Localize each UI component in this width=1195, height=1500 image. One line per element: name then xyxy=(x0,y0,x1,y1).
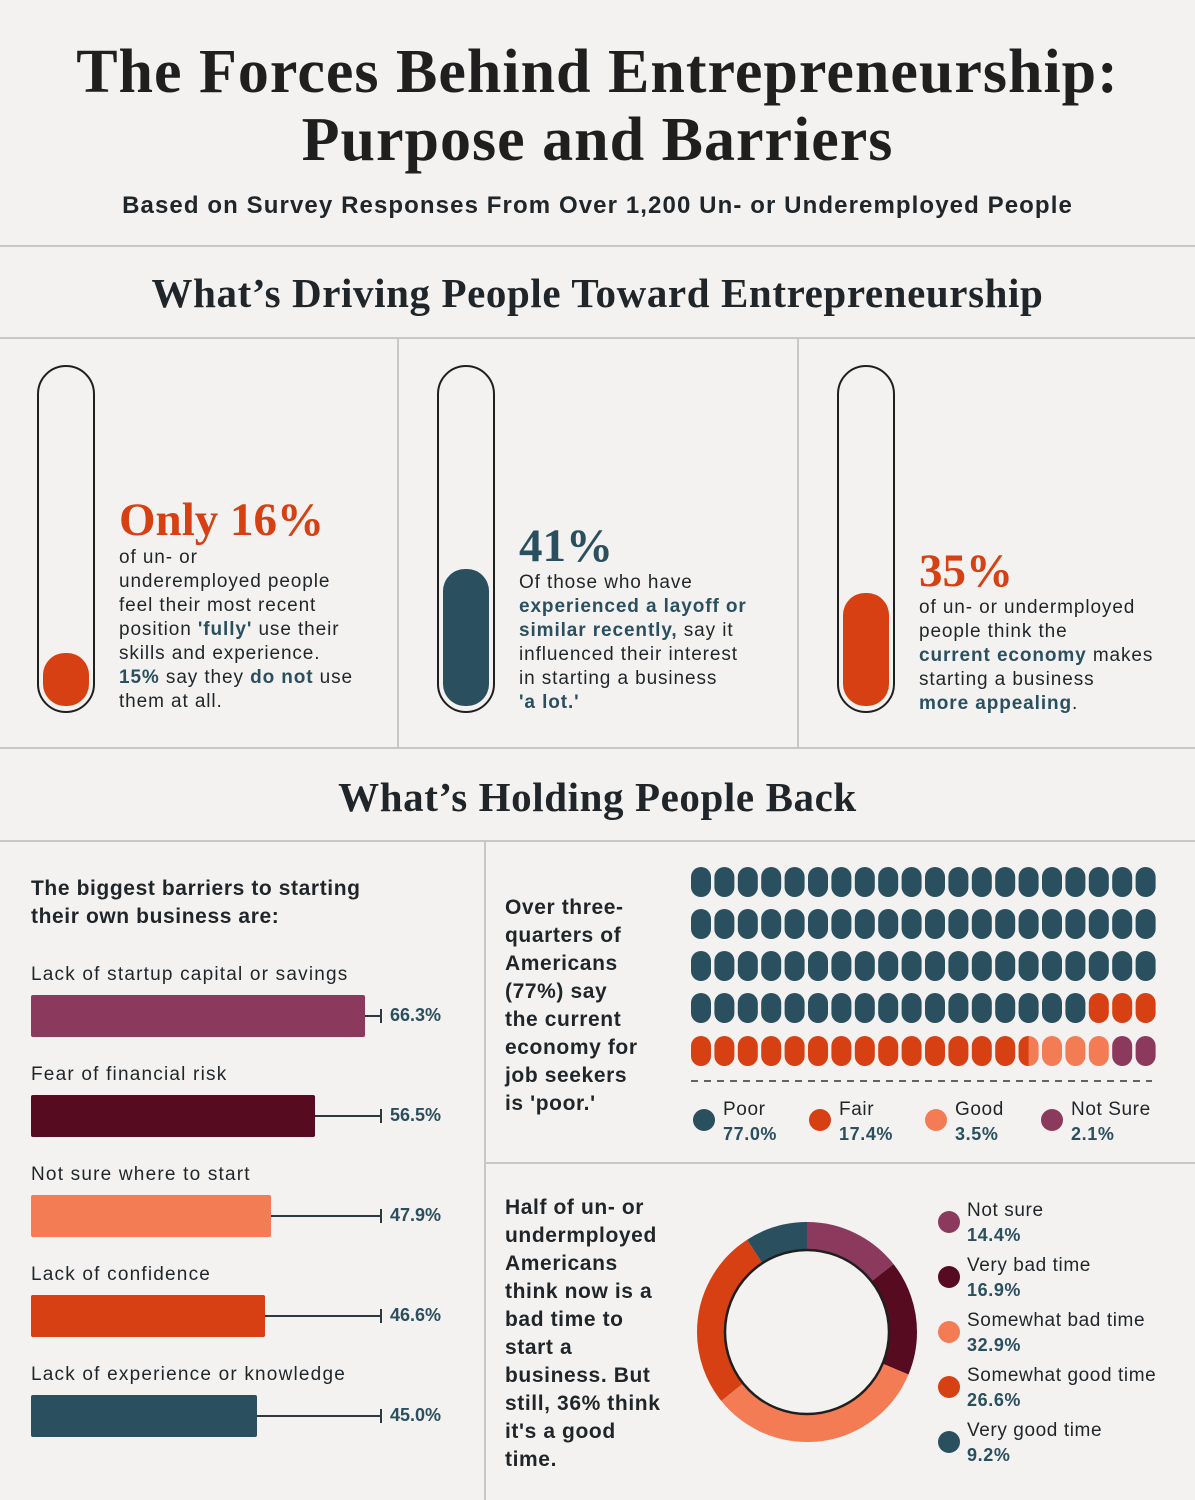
icon: thermometer 35% xyxy=(837,365,895,713)
text block: start a xyxy=(505,1336,572,1359)
legend: donut: 9.2% xyxy=(967,1445,1010,1465)
panel: barriers bar chart xyxy=(31,877,441,1437)
stat: 41%: 41% xyxy=(519,520,613,572)
text block xyxy=(119,547,353,712)
bar: where to start: 47.9% xyxy=(390,1205,441,1225)
bar: financial risk: 56.5% xyxy=(390,1105,441,1125)
panel: economy waffle text: is 'poor.' xyxy=(505,1092,596,1115)
panel: 16% xyxy=(37,365,353,713)
title: Purpose and Barriers xyxy=(302,106,893,174)
text block: undermployed xyxy=(505,1224,657,1247)
legend: waffle: Good xyxy=(955,1099,1004,1120)
text block: them at all. xyxy=(119,691,223,712)
bar: startup capital xyxy=(31,964,441,1037)
text block: of un- or undermployed xyxy=(919,597,1135,618)
bar: confidence: Lack of confidence xyxy=(31,1264,211,1285)
text block: skills and experience. xyxy=(119,643,320,664)
legend: donut: Somewhat bad time xyxy=(967,1310,1145,1331)
title xyxy=(76,38,1119,174)
text block: Half of un- or xyxy=(505,1196,644,1219)
text block: starting a business xyxy=(919,669,1095,690)
text block: experienced a layoff or xyxy=(519,596,747,617)
panel: economy waffle text: economy for xyxy=(505,1036,638,1059)
bar: financial risk xyxy=(31,1064,441,1137)
chart heading: The biggest barriers to starting xyxy=(31,877,361,900)
panel: economy waffle text: (77%) say xyxy=(505,980,607,1003)
bar: experience: 45.0% xyxy=(390,1405,441,1425)
legend: donut: 14.4% xyxy=(967,1225,1021,1245)
text block: people think the xyxy=(919,621,1068,642)
bar: financial risk: Fear of financial risk xyxy=(31,1064,227,1085)
text block xyxy=(505,1196,660,1471)
stat: only 16%: Only 16% xyxy=(119,494,324,546)
legend: donut: Somewhat good time xyxy=(967,1365,1156,1386)
panel: economy waffle text: job seekers xyxy=(505,1064,627,1087)
text block: more appealing. xyxy=(919,693,1078,714)
legend: waffle: 2.1% xyxy=(1071,1124,1114,1144)
bar: startup capital: Lack of startup capital or savings xyxy=(31,964,348,985)
bar: where to start xyxy=(31,1164,441,1237)
legend: waffle: Poor xyxy=(723,1099,766,1120)
legend: donut: 32.9% xyxy=(967,1335,1021,1355)
bar: experience xyxy=(31,1364,441,1437)
donut chart xyxy=(697,1222,917,1442)
legend: donut: 16.9% xyxy=(967,1280,1021,1300)
chart heading xyxy=(31,877,361,928)
legend: waffle: Fair xyxy=(839,1099,874,1120)
legend: waffle: 17.4% xyxy=(839,1124,893,1144)
legend: waffle: 77.0% xyxy=(723,1124,777,1144)
text block: in starting a business xyxy=(519,668,717,689)
text block: 'a lot.' xyxy=(519,692,580,713)
text block: business. But xyxy=(505,1364,650,1387)
chart heading: their own business are: xyxy=(31,905,279,928)
icon: thermometer 41% xyxy=(437,365,495,713)
section heading: holding back: What’s Holding People Back xyxy=(338,774,857,820)
legend: donut: Very bad time xyxy=(967,1255,1091,1276)
waffle chart xyxy=(691,867,1156,1082)
text block: Americans xyxy=(505,1252,618,1275)
panel: economy waffle text: the current xyxy=(505,1008,621,1031)
stat: 35%: 35% xyxy=(919,545,1013,597)
text block: 15% say they do not use xyxy=(119,667,353,688)
text block: still, 36% think xyxy=(505,1392,660,1415)
legend: donut: Very good time xyxy=(967,1420,1102,1441)
text block: Of those who have xyxy=(519,572,693,593)
text block xyxy=(919,597,1153,714)
text block: of un- or xyxy=(119,547,198,568)
panel: economy waffle text: quarters of xyxy=(505,924,621,947)
panel: 35% xyxy=(837,365,1153,714)
text block: influenced their interest xyxy=(519,644,738,665)
bar: experience: Lack of experience or knowledge xyxy=(31,1364,346,1385)
text block: time. xyxy=(505,1448,557,1471)
icon: thermometer 16% xyxy=(37,365,95,713)
subtitle: Based on Survey Responses From Over 1,200 Un- or Underemployed People xyxy=(122,192,1073,219)
text block: similar recently, say it xyxy=(519,620,734,641)
panel: 41% xyxy=(437,365,747,713)
bar: where to start: Not sure where to start xyxy=(31,1164,251,1185)
bar: confidence xyxy=(31,1264,441,1337)
text block: feel their most recent xyxy=(119,595,316,616)
bar: startup capital: 66.3% xyxy=(390,1005,441,1025)
bar: confidence: 46.6% xyxy=(390,1305,441,1325)
text block: position 'fully' use their xyxy=(119,619,339,640)
legend: waffle xyxy=(693,1099,1151,1144)
text block: bad time to xyxy=(505,1308,624,1331)
text block: underemployed people xyxy=(119,571,330,592)
legend: waffle: 3.5% xyxy=(955,1124,998,1144)
legend: donut: Not sure xyxy=(967,1200,1044,1221)
panel: timing donut xyxy=(505,1196,1156,1471)
text block xyxy=(519,572,747,713)
text block: it's a good xyxy=(505,1420,616,1443)
section heading: driving: What’s Driving People Toward Entrepreneurship xyxy=(152,270,1043,316)
text block: current economy makes xyxy=(919,645,1153,666)
legend: waffle: Not Sure xyxy=(1071,1099,1151,1120)
text block: think now is a xyxy=(505,1280,652,1303)
legend: donut xyxy=(938,1200,1156,1465)
title: The Forces Behind Entrepreneurship: xyxy=(76,38,1119,106)
legend: donut: 26.6% xyxy=(967,1390,1021,1410)
panel: economy waffle text xyxy=(504,896,638,1115)
panel: economy waffle text: Americans xyxy=(505,952,618,975)
panel: economy waffle text: Over three- xyxy=(505,896,624,919)
